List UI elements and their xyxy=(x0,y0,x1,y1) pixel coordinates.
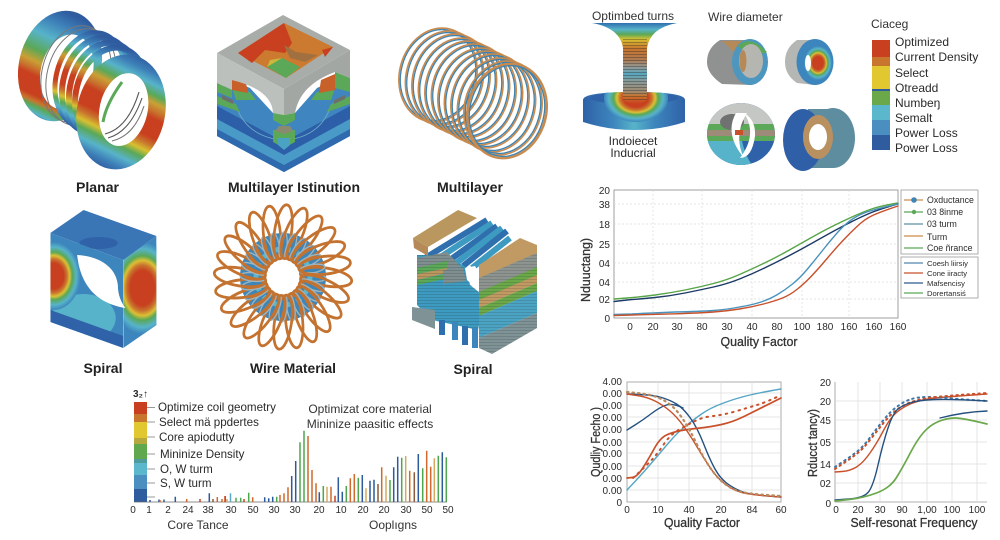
scale labels: S, W turm xyxy=(160,477,212,490)
x axis numbers: 20 xyxy=(852,505,864,516)
x axis numbers: 20 xyxy=(647,322,659,333)
legend labels: Current Density xyxy=(895,50,978,64)
bottom fins xyxy=(442,320,475,348)
mid green band xyxy=(417,261,447,274)
x axis numbers: 50 xyxy=(442,505,454,516)
scale labels xyxy=(158,401,276,490)
panel: optimized turns model xyxy=(583,9,685,160)
y axis numbers xyxy=(603,377,622,509)
cylinder model 3 xyxy=(707,103,777,165)
navy sigmoid curve xyxy=(835,399,987,500)
caption: Indoiecet xyxy=(609,134,658,148)
back ring xyxy=(7,2,113,130)
hole windings xyxy=(103,82,144,141)
y axis numbers: 20 xyxy=(820,397,831,408)
x axis numbers: 160 xyxy=(890,322,907,333)
y axis numbers xyxy=(599,186,610,325)
x axis numbers: 2 xyxy=(165,505,171,516)
scale labels: O, W turm xyxy=(160,463,213,476)
legend labels: Numbeŋ xyxy=(895,96,940,110)
legend labels xyxy=(895,35,978,155)
legend box upper: Coe ñrance xyxy=(927,243,973,253)
blue curve xyxy=(614,204,898,314)
green zone xyxy=(267,58,300,78)
left lower face xyxy=(217,80,284,172)
legend box upper: Oxductance xyxy=(927,195,974,205)
red rising curve xyxy=(627,398,781,478)
x axis numbers xyxy=(627,322,907,333)
y axis numbers: 0.00 xyxy=(603,413,622,424)
y axis numbers: 18 xyxy=(599,220,610,231)
x axis numbers: 180 xyxy=(817,322,834,333)
left tan bar top xyxy=(413,210,477,247)
3D model: spiral block xyxy=(50,210,156,348)
middle windings xyxy=(31,18,157,150)
grey frame left xyxy=(217,53,284,115)
cylinder model 1 xyxy=(707,39,768,85)
x axis numbers: 84 xyxy=(746,505,758,516)
line chart: quality factor xyxy=(588,377,787,530)
x axis numbers: 160 xyxy=(866,322,883,333)
centre corner block xyxy=(273,126,295,150)
legend box upper: 03 turm xyxy=(927,219,957,229)
x axis numbers: 40 xyxy=(683,505,695,516)
x axis numbers: 20 xyxy=(357,505,369,516)
y axis numbers: 25 xyxy=(599,240,610,251)
green curve xyxy=(614,203,898,299)
x axis numbers: 0 xyxy=(833,505,839,516)
y axis numbers: 4.00 xyxy=(603,377,622,388)
red zone xyxy=(238,23,292,63)
y axis numbers: 38 xyxy=(599,200,610,211)
caption xyxy=(609,134,658,160)
label: multilayer insulation: Multilayer Istinution xyxy=(228,179,360,195)
red curve xyxy=(614,206,898,316)
legend labels: Power Loss xyxy=(895,141,958,155)
right green block xyxy=(335,72,350,92)
chart notes xyxy=(307,402,433,431)
plot frame xyxy=(627,382,781,502)
blue dotted curve xyxy=(835,397,987,467)
x axis numbers: 0 xyxy=(130,505,136,516)
y axis numbers: 20 xyxy=(599,186,610,197)
cylinder model 4 xyxy=(783,108,855,171)
y axis numbers: 45 xyxy=(820,416,831,427)
label: spiral: Spiral xyxy=(84,360,122,376)
pillar layer lines xyxy=(479,253,537,354)
x axis numbers: 80 xyxy=(696,322,708,333)
x axis captions: Core Tance xyxy=(167,518,229,532)
x axis numbers: 30 xyxy=(671,322,683,333)
legend box upper: 03 8inme xyxy=(927,207,963,217)
x axis numbers: 0 xyxy=(624,505,630,516)
legend box upper xyxy=(901,190,978,254)
left green strips xyxy=(217,80,256,112)
mid tan band xyxy=(417,268,447,280)
x axis numbers: 1,00 xyxy=(917,505,937,516)
right green strips xyxy=(311,74,350,112)
legend box lower: Dorertansiś xyxy=(927,289,966,298)
y axis numbers: 04 xyxy=(599,259,610,270)
cyan streaks xyxy=(256,249,310,305)
3D model: multilayer insulation block xyxy=(217,15,350,172)
bottom left block xyxy=(412,307,435,329)
grey frame top xyxy=(217,15,350,89)
scale labels: Select mä ppdertes xyxy=(159,416,259,429)
green curve xyxy=(835,418,987,501)
navy curve xyxy=(614,204,898,302)
legend labels: Semalt xyxy=(895,111,933,125)
caption: Inducrial xyxy=(610,146,656,160)
legend bar xyxy=(872,40,890,150)
centre hole xyxy=(273,262,297,292)
x axis numbers: 30 xyxy=(225,505,237,516)
y axis numbers: 0 xyxy=(825,499,831,510)
left face xyxy=(50,233,124,348)
right pillar bands xyxy=(479,238,537,354)
brown streak xyxy=(284,45,318,62)
y axis numbers: 04 xyxy=(599,278,610,289)
x axis numbers xyxy=(833,505,986,516)
x axis numbers: 50 xyxy=(247,505,259,516)
red curve xyxy=(835,394,987,472)
x axis numbers: 100 xyxy=(944,505,961,516)
x axis numbers: 100 xyxy=(969,505,986,516)
3D model: multilayer coil xyxy=(389,19,558,168)
x axis numbers: 100 xyxy=(794,322,811,333)
y axis numbers: 02 xyxy=(599,295,610,306)
x axis numbers: 50 xyxy=(421,505,433,516)
axis marker title: 3₂↑ xyxy=(133,389,148,400)
legend labels: Optimized xyxy=(895,35,949,49)
legend box upper: Turm xyxy=(927,232,947,242)
y axis title: Rducct tancy) xyxy=(805,409,820,477)
legend: current density scale xyxy=(871,17,978,155)
cyan curve xyxy=(627,389,781,490)
plot frame xyxy=(835,382,987,502)
x axis numbers xyxy=(624,505,787,516)
y axis numbers: 14 xyxy=(820,460,831,471)
plot frame xyxy=(614,190,898,318)
x axis title: Self-resonat Frequency xyxy=(850,515,978,530)
grey frame right xyxy=(284,50,350,115)
x axis numbers: 40 xyxy=(746,322,758,333)
opening xyxy=(465,266,487,297)
y axis title: Nduuctang) xyxy=(578,238,593,302)
x axis numbers: 30 xyxy=(874,505,886,516)
dome arcs xyxy=(236,105,331,140)
front winding xyxy=(456,54,558,168)
cylinder model 2 xyxy=(785,39,834,85)
y axis numbers: 0 xyxy=(604,314,610,325)
scale labels: Optimize coil geometry xyxy=(158,401,276,414)
left tan bar front xyxy=(413,238,428,256)
y axis numbers: 0.00 xyxy=(603,474,622,485)
x axis numbers: 80 xyxy=(771,322,783,333)
dotted rising curve xyxy=(633,395,781,478)
funnel and neck xyxy=(592,23,677,104)
x axis captions xyxy=(167,518,417,532)
mid layer lines xyxy=(417,255,485,330)
front ring xyxy=(65,46,177,178)
x axis numbers: 30 xyxy=(721,322,733,333)
label: wire material: Wire Material xyxy=(250,360,336,376)
line chart: self-resonant frequency xyxy=(805,378,987,530)
x axis numbers: 1 xyxy=(146,505,152,516)
y axis numbers: 0.00 xyxy=(603,462,622,473)
x axis title: Quality Factor xyxy=(664,515,741,530)
x axis numbers: 10 xyxy=(652,505,664,516)
red falling curve xyxy=(627,394,781,497)
orange dotted curve xyxy=(835,393,987,469)
x axis numbers: 30 xyxy=(400,505,412,516)
right face xyxy=(123,236,156,348)
y axis numbers: 0.00 xyxy=(603,449,622,460)
baseline xyxy=(134,501,447,503)
x axis numbers: 90 xyxy=(896,505,908,516)
bars xyxy=(150,431,446,502)
legend box lower xyxy=(901,257,978,298)
right lower face xyxy=(284,80,350,172)
3D model: toroidal wire coil xyxy=(212,203,354,351)
mid gray band xyxy=(417,252,462,272)
pillar foot xyxy=(273,113,295,126)
y axis numbers: 0.00 xyxy=(603,401,622,412)
left green block xyxy=(217,83,232,98)
blue core xyxy=(252,245,314,309)
x axis numbers: 160 xyxy=(841,322,858,333)
x axis numbers: 20 xyxy=(313,505,325,516)
legend labels: Power Loss xyxy=(895,126,958,140)
legend box lower: Coesh liirsiy xyxy=(927,259,968,268)
label: multilayer: Multilayer xyxy=(437,179,504,195)
mid grey patch xyxy=(443,268,466,284)
y axis numbers: 0.00 xyxy=(603,425,622,436)
y axis numbers: 0.00 xyxy=(603,389,622,400)
top face xyxy=(50,210,156,260)
heading: Optimbed turns xyxy=(592,9,674,23)
x axis title: Quality Factor xyxy=(720,334,798,349)
top opening xyxy=(238,23,333,78)
y axis numbers: 05 xyxy=(820,438,831,449)
heading: wire diameter: Wire diameter xyxy=(708,10,783,24)
x axis numbers: 20 xyxy=(715,505,727,516)
x axis numbers: 30 xyxy=(289,505,301,516)
line chart: inductance vs quality factor xyxy=(578,186,978,349)
right red corner xyxy=(322,47,333,57)
3D model: stacked spiral xyxy=(412,210,537,354)
colour scale xyxy=(134,402,155,502)
x axis numbers: 0 xyxy=(627,322,633,333)
y axis numbers: 0.00 xyxy=(603,438,622,449)
mid green band 2 xyxy=(417,274,445,285)
scale labels: Core apiodutty xyxy=(159,431,235,444)
y axis numbers: 0 xyxy=(616,498,622,509)
back fins xyxy=(425,220,510,268)
copper loops xyxy=(212,203,354,351)
y axis numbers: 0.00 xyxy=(603,486,622,497)
legend labels: Select xyxy=(895,66,929,80)
label: spiral stack: Spiral xyxy=(454,361,492,377)
x axis numbers: 30 xyxy=(268,505,280,516)
legend title: Ciaceg xyxy=(871,17,908,31)
scale labels: Mininize Density xyxy=(160,448,245,461)
chart notes: Optimizat core material xyxy=(308,402,432,416)
3D model: planar coil xyxy=(7,2,177,178)
x axis numbers: 24 xyxy=(182,505,194,516)
y axis title: Qudliy Fecho ) xyxy=(588,407,603,477)
dark spot on top face xyxy=(79,237,118,249)
legend box lower: Mafsencisy xyxy=(927,279,965,288)
legend labels: Otreadd xyxy=(895,81,938,95)
navy rising curve xyxy=(627,404,683,430)
yellow zone xyxy=(267,58,282,67)
x axis captions: Ooplıgns xyxy=(369,518,417,532)
dotted falling curve xyxy=(627,392,781,496)
legend box lower: Cone iiracty xyxy=(927,269,967,278)
x axis numbers: 10 xyxy=(335,505,347,516)
x axis numbers: 20 xyxy=(378,505,390,516)
navy falling curve xyxy=(627,394,781,497)
mid body xyxy=(417,255,485,330)
base disc xyxy=(583,92,685,130)
y axis numbers: 20 xyxy=(820,378,831,389)
label: planar: Planar xyxy=(76,179,120,195)
histogram panel xyxy=(130,389,454,532)
lens opening xyxy=(77,255,125,308)
x axis numbers xyxy=(130,505,454,516)
y axis numbers xyxy=(820,378,831,510)
chart notes: Mininize paasitic effects xyxy=(307,417,433,431)
x axis numbers: 38 xyxy=(202,505,214,516)
y axis numbers: 02 xyxy=(820,479,831,490)
front ring hole xyxy=(92,68,155,151)
winding stripes xyxy=(623,38,647,100)
navy upper curve xyxy=(940,411,987,418)
x axis numbers: 60 xyxy=(775,505,787,516)
